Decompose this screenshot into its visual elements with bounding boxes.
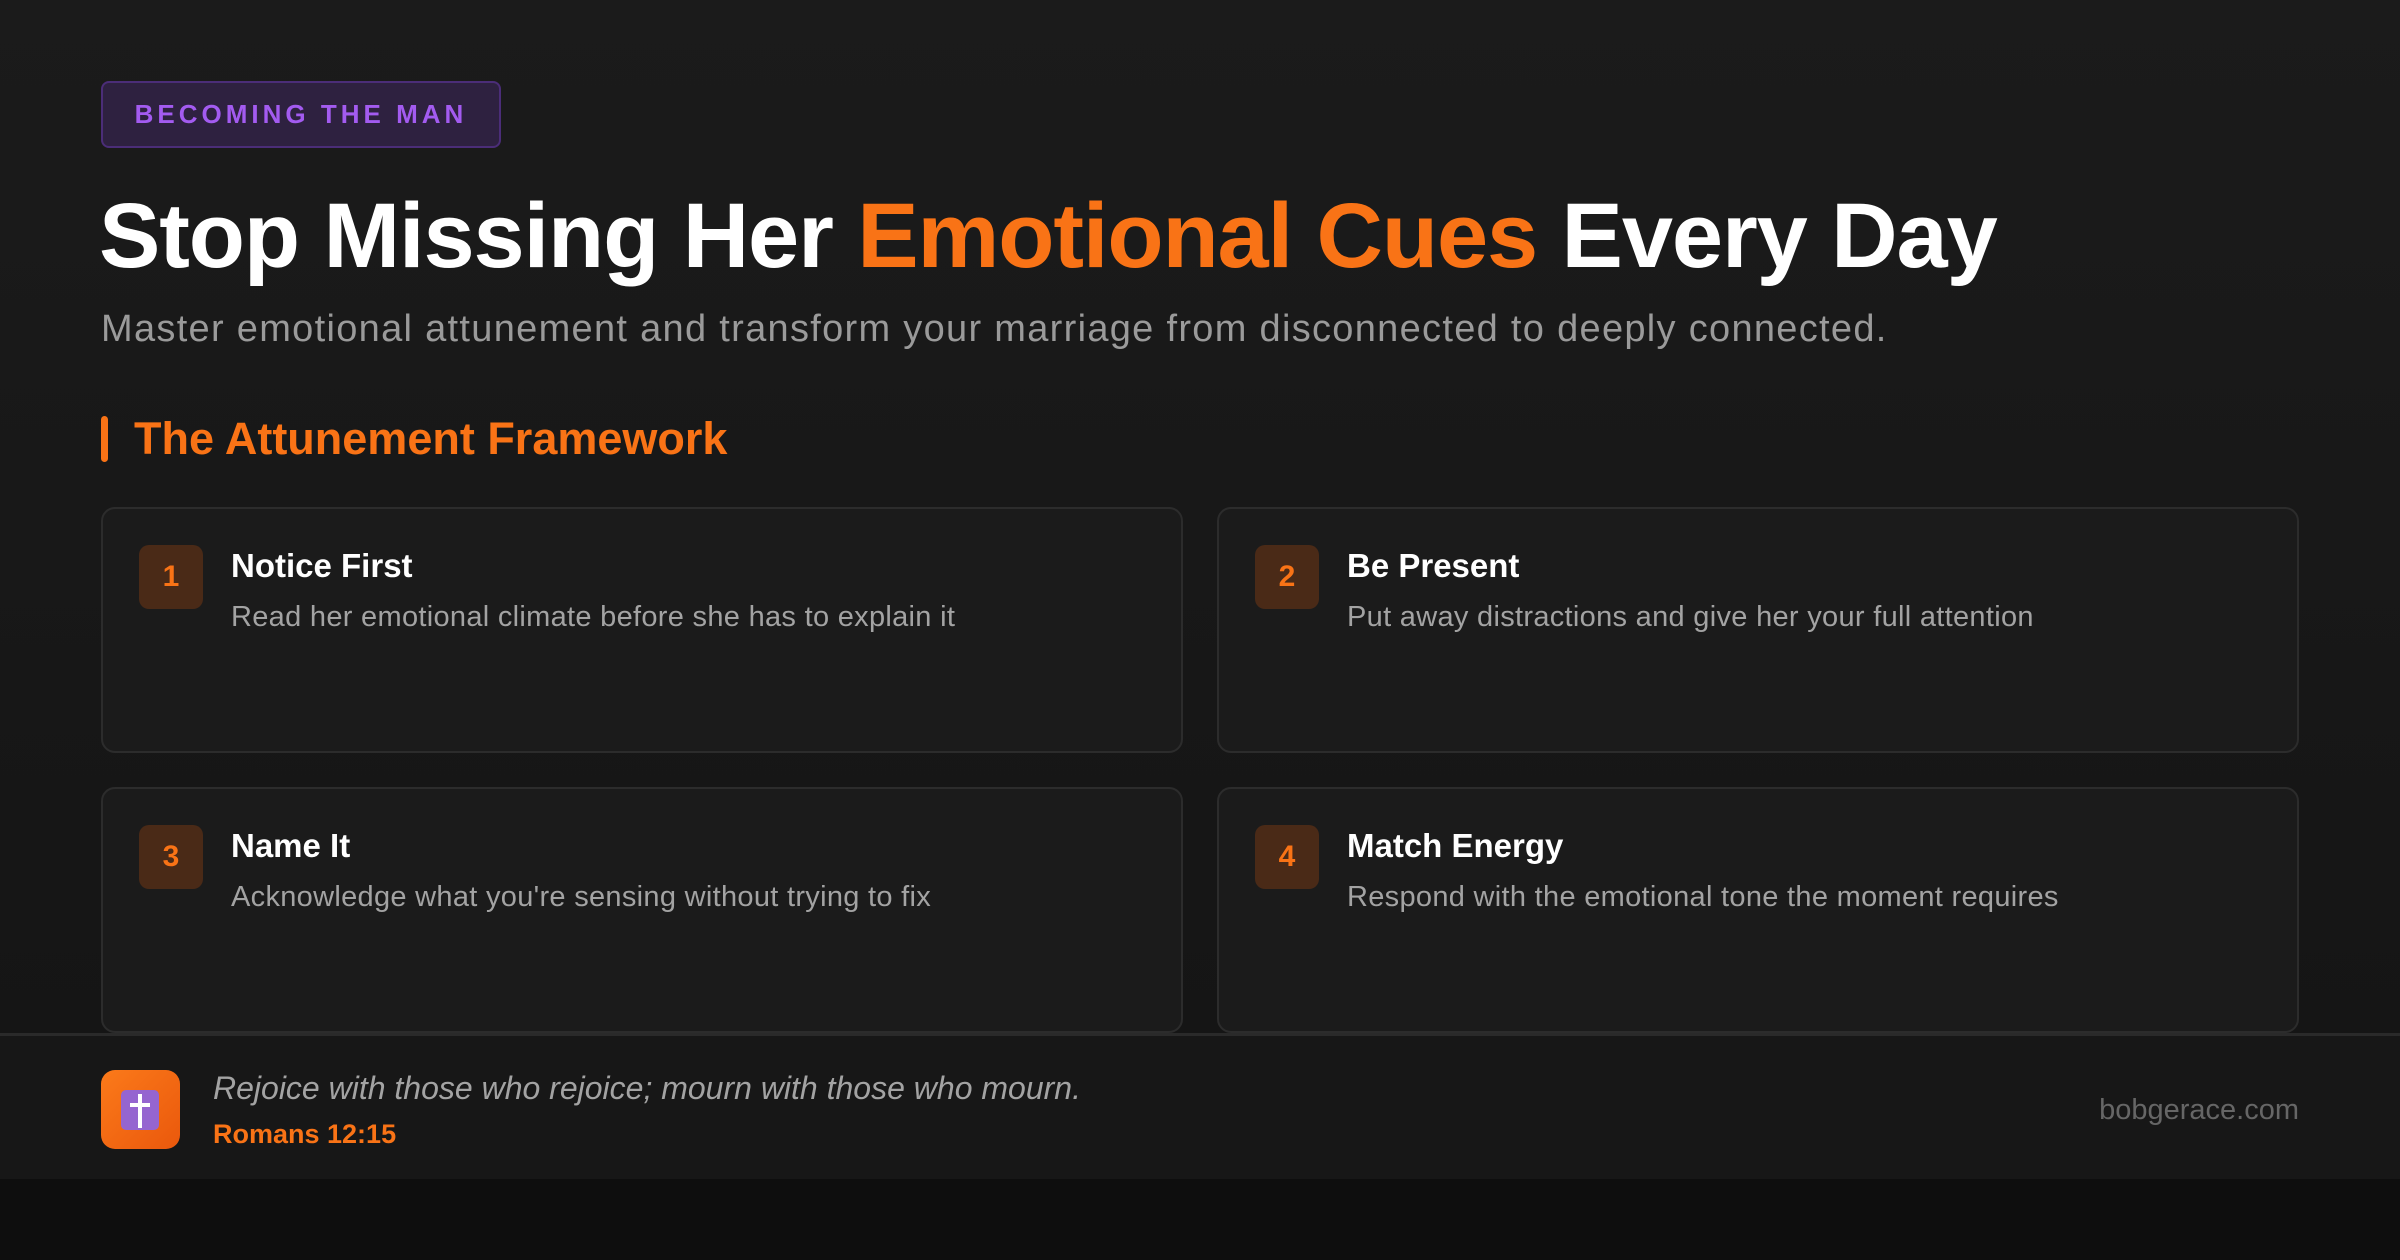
card: match energy: Match Energy [1347,827,1563,864]
quote: Rejoice with those who rejoice; mourn with those who mourn. [213,1070,1081,1106]
card: notice first: Notice First [231,547,413,584]
badge [101,81,501,148]
card: be present: Be Present [1347,547,1519,584]
card: name it: 3 [163,840,179,873]
card: match energy [1217,787,2299,1033]
reference: Romans 12:15 [213,1119,396,1149]
section heading: The Attunement Framework [134,413,727,464]
card: name it [101,787,1183,1033]
card: notice first: 1 [163,560,179,593]
card: name it: Name It [231,827,350,864]
card: match energy: Respond with the emotional tone the moment requires [1347,881,2059,913]
icon: cross [101,1070,180,1149]
footer [0,1033,2400,1179]
card: name it: Acknowledge what you're sensing without trying to fix [231,881,931,913]
title: Stop Missing Her Emotional Cues Every Day [99,185,1997,287]
badge: BECOMING THE MAN [135,99,467,129]
card: notice first: Read her emotional climate before she has to explain it [231,601,955,633]
card: be present [1217,507,2299,753]
card: match energy: 4 [1279,840,1295,873]
card: notice first [101,507,1183,753]
card: be present: 2 [1279,560,1295,593]
card: be present: Put away distractions and give her your full attention [1347,601,2034,633]
subtitle: Master emotional attunement and transform your marriage from disconnected to deeply connected. [101,308,1888,350]
site: bobgerace.com [2099,1094,2299,1126]
